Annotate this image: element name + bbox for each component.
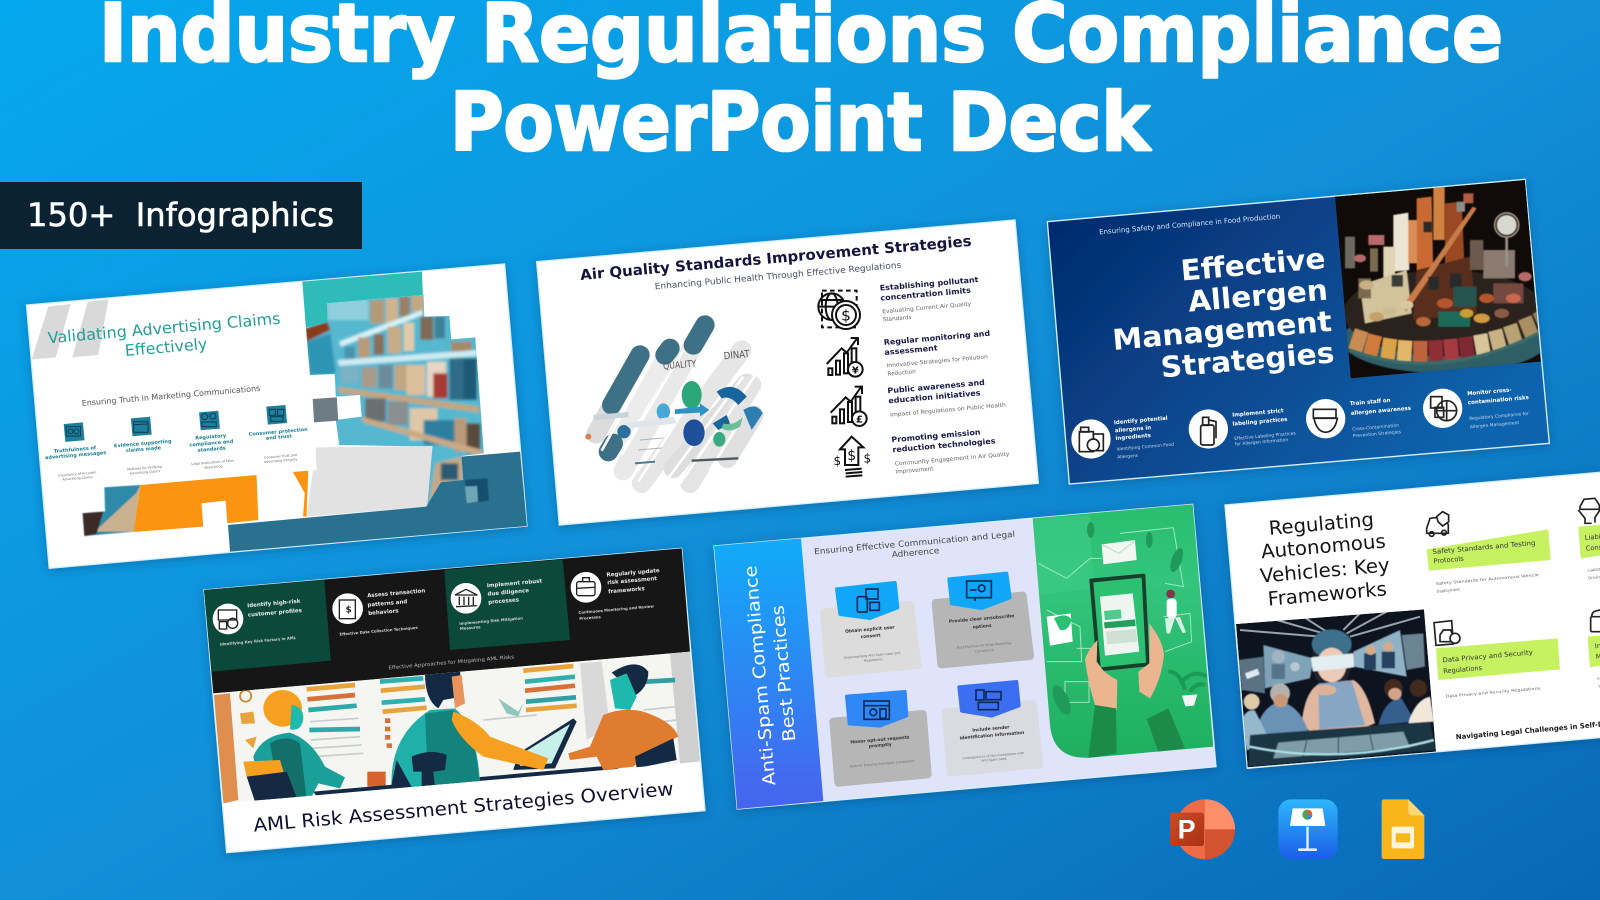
item descriptions: Identifying Key Risk Factors in AML (220, 635, 297, 647)
heading (1111, 241, 1336, 384)
green photo panel (1030, 502, 1217, 765)
cards (824, 596, 1039, 783)
item labels: Consumer protection (248, 427, 308, 438)
item descriptions: Regulatory Compliance for (1469, 411, 1529, 422)
card descriptions: Anti-Spam Laws (981, 757, 1007, 763)
item descriptions: Prevention Strategies (1353, 429, 1402, 439)
label descriptions (1436, 564, 1600, 699)
icon: PowerPoint (1170, 799, 1235, 859)
card headings: consent (860, 632, 882, 640)
icon: house with dollar (834, 437, 871, 477)
icon: chart yen (827, 338, 863, 377)
collage details: DINAT (723, 349, 751, 362)
item labels: compliance and (189, 439, 234, 448)
title (99, 0, 1503, 169)
heading: Autonomous (1260, 530, 1387, 563)
collage details: QUALITY (663, 358, 697, 372)
item descriptions: Impact of Regulations on Public Health (890, 403, 1006, 419)
badge: 150+ Infographics (0, 182, 362, 249)
item headings: processes (488, 597, 519, 606)
badge: 150+ Infographics: 150+ Infographics (27, 196, 334, 234)
blue tabs (837, 573, 1019, 726)
item headings: allergen awareness (1351, 406, 1411, 417)
card headings: promptly (869, 742, 892, 750)
item headings (879, 275, 996, 454)
item headings: ingredients (1115, 433, 1151, 442)
item headings: allergens in (1115, 425, 1152, 434)
item descriptions: Effective Labeling Practices (1234, 431, 1297, 442)
slide background (1047, 179, 1549, 484)
vertical heading: Best Practices (768, 604, 800, 742)
item headings: Identify potential (1114, 416, 1168, 426)
item descriptions: Evaluating Current Air Quality (882, 302, 972, 315)
laptop (513, 718, 577, 770)
item descriptions: Innovative Strategies for Pollution (886, 354, 989, 369)
icon: chart pound: £ (856, 415, 863, 426)
item headings: education initiatives (888, 388, 981, 405)
icon outlines: $ (346, 606, 352, 616)
slide background (714, 504, 1216, 809)
item headings: Promoting emission (891, 428, 981, 444)
item labels: Regulatory (195, 433, 227, 442)
item descriptions (220, 603, 654, 647)
item headings: Monitor cross- (1467, 387, 1512, 397)
item descriptions: Effective Data Collection Techniques (339, 625, 419, 637)
icon: car in hands (1578, 498, 1600, 523)
item headings: Implement strict (1232, 408, 1284, 419)
subtitle: Ensuring Safety and Compliance in Food Production (1099, 213, 1280, 236)
icon: document with car (1434, 621, 1460, 645)
left person (263, 690, 302, 727)
icon: globe with dollar (818, 291, 860, 329)
item labels (45, 427, 308, 461)
shelves photo (306, 295, 484, 506)
heading: Validating Advertising Claims (47, 309, 281, 347)
heading: AML Risk Assessment Strategies Overview (253, 779, 674, 837)
icon: PowerPoint: P (1178, 815, 1196, 845)
item descriptions: for Allergen Information (1235, 437, 1289, 448)
icon circles (213, 572, 601, 634)
grey paper (307, 446, 433, 517)
icon: Google Slides (1382, 799, 1424, 859)
item descriptions: Implementing Risk Mitigation (459, 615, 523, 626)
teal block (302, 272, 423, 328)
card descriptions: Best Practices for Email Marketing (957, 641, 1011, 650)
panel: slide advertising claims (27, 264, 527, 568)
right person (612, 664, 648, 697)
heading: Strategies (1159, 335, 1336, 384)
item descriptions: Advertising Claims (130, 469, 161, 476)
center person (391, 708, 480, 790)
icon circles (1071, 389, 1462, 459)
item labels: and trust (266, 434, 293, 442)
item descriptions: Advertising Integrity (264, 457, 297, 464)
card headings: identification information (959, 730, 1024, 741)
panel: slide AML risk (204, 548, 705, 853)
slide background (27, 264, 527, 568)
item descriptions: Standards (883, 315, 912, 323)
icon: chart pound (831, 387, 867, 426)
card descriptions: Consequences of Non-Compliance with (962, 751, 1024, 760)
panel: slide air quality (537, 220, 1038, 525)
heading (1259, 508, 1391, 611)
heading: Frameworks (1267, 577, 1388, 611)
item descriptions: Processes (579, 614, 602, 621)
item headings: Regular monitoring and (883, 329, 990, 347)
food model photo (1335, 180, 1554, 378)
item headings: labeling practices (1232, 417, 1288, 428)
icon: house with dollar: $ (864, 451, 871, 465)
dark teal band (228, 452, 527, 552)
item headings: reduction technologies (892, 436, 996, 454)
subtitle: Enhancing Public Health Through Effective Regulations (654, 261, 902, 292)
item headings (247, 568, 660, 619)
label text (1432, 527, 1600, 675)
heading: Management (1111, 304, 1333, 357)
heading: Allergen (1187, 273, 1329, 319)
lower-left photo fragment (83, 485, 141, 536)
item headings: patterns and (367, 599, 408, 609)
icon: globe with dollar: $ (841, 307, 851, 325)
slide background (204, 548, 705, 853)
card descriptions (844, 641, 1024, 769)
blue side panel (714, 538, 823, 809)
office illustration (213, 652, 700, 807)
icons (64, 405, 287, 442)
item descriptions: Continuous Monitoring and Review (578, 603, 654, 615)
item descriptions: Methods for Verifying (127, 465, 162, 471)
hands (1085, 640, 1117, 710)
item headings: Assess transaction (367, 588, 426, 599)
card headings: Provide clear unsubscribe (949, 613, 1015, 625)
item descriptions: Community Engagement in Air Quality (895, 452, 1010, 468)
panel: slide allergen management (1047, 179, 1554, 484)
orange garment (134, 475, 258, 532)
black top band (204, 548, 690, 693)
item descriptions: Advertising (204, 464, 223, 470)
label text: Protocols (1433, 555, 1465, 565)
item headings (1114, 387, 1529, 442)
card headings: options (973, 623, 992, 630)
diagonal strip collage (596, 325, 757, 492)
item headings: assessment (884, 343, 938, 357)
title: PowerPoint Deck (450, 76, 1152, 169)
label text: Regulations (1443, 664, 1483, 675)
quote marks (32, 299, 108, 359)
icon: Keynote (1278, 799, 1338, 859)
heading: Regulating (1268, 508, 1375, 540)
item descriptions (58, 453, 297, 482)
lime labels (1427, 525, 1600, 680)
icon outlines (1079, 397, 1457, 452)
item headings: frameworks (608, 586, 645, 595)
item descriptions (882, 302, 1010, 476)
item labels: claims made (126, 445, 162, 454)
green blocks (204, 559, 570, 672)
item descriptions: Improvement (895, 466, 935, 476)
item descriptions: Identifying Common Food (1116, 442, 1174, 453)
item descriptions (1116, 411, 1529, 461)
icon: house with dollar: $ (834, 454, 841, 468)
icon: house with dollar: $ (847, 448, 856, 464)
icon outlines (218, 578, 595, 629)
heading: Vehicles: Key (1259, 553, 1391, 588)
item descriptions: Importance of Accurate (58, 470, 97, 478)
item headings: contamination risks (1468, 395, 1529, 406)
collage details (585, 349, 763, 463)
label text: Data Privacy and Security (1442, 648, 1533, 664)
card headings: Include sender (972, 724, 1011, 734)
heading: Air Quality Standards Improvement Strategies (580, 233, 972, 284)
item descriptions: Consumer Trust and (264, 453, 297, 460)
label descriptions: Data Privacy and Security Regulations (1445, 685, 1540, 699)
slide background (537, 220, 1038, 525)
band caption: Effective Approaches for Mitigating AML Risks (388, 654, 515, 671)
item headings: Public awareness and (887, 378, 985, 395)
item descriptions: Allergens (1117, 453, 1139, 461)
item headings: due diligence (487, 588, 530, 598)
heading: Effectively (124, 334, 208, 360)
icon row: app logos (1170, 799, 1424, 859)
futuristic meeting photo (1236, 609, 1436, 767)
icon: car with shield (1427, 512, 1449, 536)
item headings: customer profiles (248, 608, 302, 619)
photo squares (313, 397, 338, 422)
card headings (845, 613, 1024, 750)
label text: Safety Standards and Testing (1432, 539, 1536, 556)
item descriptions: Measures (460, 624, 481, 631)
tab icons (857, 581, 1001, 719)
panel: slide autonomous vehicles (1225, 463, 1600, 768)
card headings: Obtain explicit user (845, 624, 896, 635)
item headings: Establishing pollutant (879, 275, 979, 293)
label descriptions: Safety Standards for Autonomous Vehicle (1436, 572, 1540, 586)
card descriptions: Regulations (864, 657, 883, 663)
subtitle: Adherence (891, 545, 940, 559)
item descriptions: Reduction (887, 369, 916, 378)
slide background (1225, 463, 1600, 768)
phone (1091, 575, 1148, 670)
item labels: advertising messages (45, 450, 107, 461)
photo square accent (465, 478, 489, 503)
card descriptions: Tools for Ensuring Anti-Spam Compliance (848, 759, 914, 769)
item labels: Evidence supporting (114, 439, 172, 449)
subtitle: Ensuring Truth in Marketing Communications (81, 383, 261, 408)
sleeves (1088, 705, 1117, 758)
item headings: Regularly update (606, 568, 660, 579)
icon: chart yen: ¥ (852, 365, 859, 376)
item headings: Identify high-risk (247, 599, 301, 609)
card descriptions: Compliance (975, 648, 994, 653)
item descriptions: Legal Implications of False (191, 459, 234, 466)
card headings: Honor opt-out requests (850, 734, 910, 746)
item headings: behaviors (368, 608, 399, 617)
item headings: concentration limits (880, 286, 972, 303)
white card (28, 282, 317, 492)
item descriptions: Allergen Management (1470, 420, 1520, 430)
item labels: standards (197, 446, 226, 454)
icon: bottle (1591, 610, 1600, 632)
item descriptions: Advertising Claims (62, 475, 93, 482)
panel: slide anti-spam (714, 502, 1217, 809)
item headings: Train staff on (1350, 398, 1391, 407)
subtitle: Ensuring Effective Communication and Legal (814, 529, 1015, 556)
item labels: Truthfulness of (54, 445, 97, 455)
card descriptions: Understanding Anti-Spam Laws and (844, 651, 901, 660)
heading: Effective (1179, 241, 1327, 288)
vertical heading (741, 565, 800, 786)
vertical heading: Anti-Spam Compliance (741, 565, 780, 786)
item descriptions: Cross-Contamination (1352, 423, 1399, 433)
item headings: Implement robust (487, 578, 543, 589)
label descriptions: Deployment (1436, 587, 1461, 594)
item headings: risk assessment (607, 576, 658, 586)
